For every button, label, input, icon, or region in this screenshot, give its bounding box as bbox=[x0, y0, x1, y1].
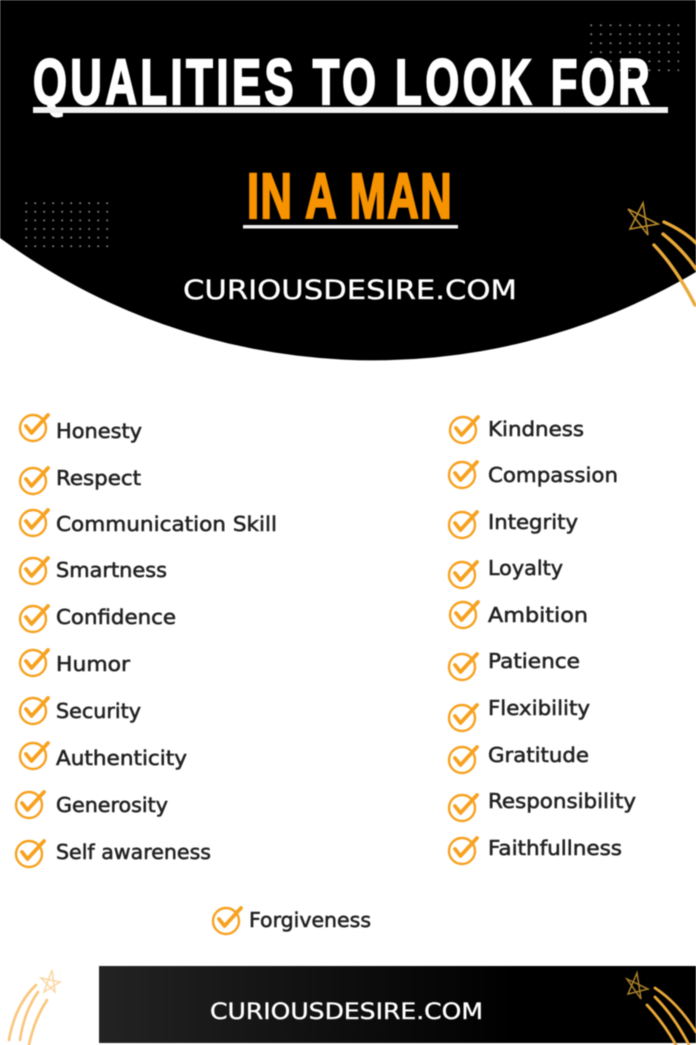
item: Generosity bbox=[16, 792, 168, 818]
website label: footer: CURIOUSDESIRE.COM bbox=[210, 1000, 483, 1025]
item: Ambition: Ambition bbox=[488, 603, 588, 627]
item: Communication Skill: Communication Skill bbox=[56, 512, 277, 536]
dot grid: top right bbox=[590, 24, 679, 72]
header panel: black curved background bbox=[0, 0, 696, 360]
item: Forgiveness bbox=[213, 908, 371, 934]
item: Compassion bbox=[449, 462, 618, 488]
item: Authenticity bbox=[20, 743, 187, 770]
item: Responsibility: Responsibility bbox=[488, 789, 636, 813]
item: Security: Security bbox=[56, 699, 141, 723]
item: Responsibility bbox=[449, 789, 636, 821]
item: Loyalty: Loyalty bbox=[488, 556, 563, 580]
list: left column bbox=[16, 415, 277, 867]
item: Forgiveness: Forgiveness bbox=[249, 908, 371, 932]
item: Confidence bbox=[20, 605, 176, 632]
list: right column bbox=[449, 417, 636, 864]
item: Flexibility bbox=[449, 696, 590, 731]
item: Ambition bbox=[450, 602, 588, 628]
icon: shooting star, header right bbox=[628, 203, 696, 305]
item: Honesty bbox=[20, 415, 142, 443]
item: Patience: Patience bbox=[488, 649, 580, 673]
title: qualities to look for: QUALITIES TO LOOK FOR bbox=[33, 46, 650, 118]
item: Gratitude bbox=[449, 743, 589, 773]
item: Humor: Humor bbox=[56, 652, 131, 676]
website label: header: CURIOUSDESIRE.COM bbox=[183, 275, 517, 306]
item: Humor bbox=[20, 650, 131, 676]
item: Faithfullness bbox=[449, 836, 622, 864]
item: Generosity: Generosity bbox=[56, 793, 168, 817]
item: Honesty: Honesty bbox=[56, 419, 142, 443]
icon: shooting star, footer left bbox=[9, 970, 60, 1045]
item: Kindness bbox=[450, 417, 584, 443]
dot grid: left bbox=[25, 202, 108, 248]
item: Respect bbox=[20, 466, 141, 494]
item: Self awareness: Self awareness bbox=[56, 840, 211, 864]
item: Smartness: Smartness bbox=[56, 558, 167, 582]
footer bar bbox=[99, 966, 696, 1043]
item: Self awareness bbox=[16, 840, 211, 867]
icon: shooting star, footer right bbox=[627, 973, 696, 1045]
item: Patience bbox=[449, 649, 580, 680]
item: Integrity: Integrity bbox=[488, 510, 578, 534]
item: Loyalty bbox=[449, 556, 563, 588]
item: Flexibility: Flexibility bbox=[488, 696, 590, 720]
item: Faithfullness: Faithfullness bbox=[488, 836, 622, 860]
item: Confidence: Confidence bbox=[56, 605, 176, 629]
item: Compassion: Compassion bbox=[488, 463, 618, 487]
item: Integrity bbox=[449, 510, 578, 538]
item: Kindness: Kindness bbox=[488, 417, 584, 441]
item: Authenticity: Authenticity bbox=[56, 746, 187, 770]
item: Smartness bbox=[20, 558, 167, 584]
item: Gratitude: Gratitude bbox=[488, 743, 589, 767]
item: Respect: Respect bbox=[56, 466, 141, 490]
subtitle: in a man: IN A MAN bbox=[247, 160, 452, 232]
item: Security bbox=[20, 698, 141, 724]
